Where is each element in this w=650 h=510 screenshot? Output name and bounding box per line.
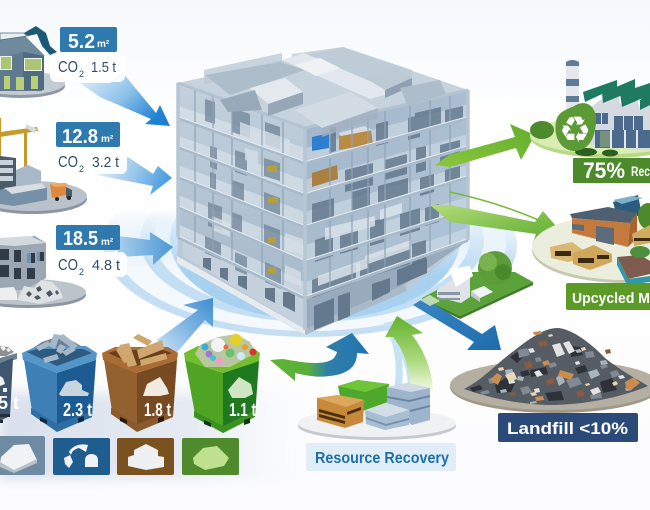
tile: concrete bbox=[0, 436, 45, 475]
tile: metal bbox=[53, 438, 110, 475]
interior equipment left face bbox=[205, 99, 281, 289]
badge: 12.8 m2 bbox=[56, 122, 120, 148]
tonnage label: 1.8 t bbox=[144, 400, 171, 420]
roof equipment bbox=[205, 62, 305, 95]
label: CO2 4.8 t bbox=[50, 252, 127, 277]
arrow: building to landfill bbox=[413, 298, 501, 350]
landfill disc bbox=[450, 361, 650, 413]
label: landfill bbox=[498, 413, 638, 442]
label: resource recovery: Resource Recovery bbox=[315, 450, 449, 467]
yellow equipment bbox=[267, 166, 278, 273]
tile: wood bbox=[117, 438, 174, 475]
panel: landfill bbox=[450, 328, 650, 413]
factory wall bbox=[590, 87, 650, 150]
icon: recycle: ♻ bbox=[559, 110, 591, 151]
brick block bbox=[572, 218, 630, 247]
swirl around the building bbox=[103, 153, 517, 337]
green bales bbox=[338, 380, 389, 412]
small white building bbox=[437, 266, 493, 303]
badge: 18.5 m2: m² bbox=[101, 237, 114, 248]
arrow: demolition to building bbox=[118, 232, 173, 265]
label: CO2 3.2 t bbox=[50, 148, 127, 174]
corner posts bbox=[178, 83, 468, 330]
green patch with small building and tree bbox=[422, 251, 533, 319]
icon: plastic bales bbox=[228, 377, 253, 398]
site disc bbox=[0, 282, 86, 308]
floor plates bbox=[178, 106, 305, 298]
badge: 5.2 m2 bbox=[60, 27, 117, 53]
tonnage label: 2.3 t bbox=[63, 400, 92, 420]
shrubs bbox=[530, 121, 554, 139]
label: CO2 3.2 t: 2 bbox=[79, 164, 84, 174]
truck bbox=[50, 183, 66, 198]
site disc bbox=[0, 184, 87, 214]
rubble bbox=[17, 280, 63, 304]
label: CO2 1.5 t bbox=[50, 55, 125, 82]
sawtooth roof bbox=[583, 79, 650, 110]
label: 75% recycled bbox=[573, 158, 650, 183]
building block bbox=[0, 156, 16, 190]
arrow: building to upcycled bbox=[430, 205, 562, 245]
badge: 12.8 m2: 12.8 bbox=[62, 126, 98, 148]
icon: stone bbox=[59, 380, 89, 396]
windows bbox=[595, 113, 650, 148]
arrow: building to recycled bbox=[435, 124, 535, 167]
label: CO2 3.2 t: CO bbox=[58, 154, 78, 171]
bin: concrete bbox=[0, 346, 19, 423]
floor slabs bbox=[178, 118, 468, 298]
label: 75% recycled: 75% bbox=[583, 158, 625, 183]
label: CO2 4.8 t: 2 bbox=[79, 267, 84, 277]
tree bbox=[478, 251, 512, 285]
grey metal stack back bbox=[387, 383, 430, 425]
building bbox=[177, 47, 468, 335]
disc bbox=[532, 217, 650, 283]
bin: metal bbox=[22, 334, 97, 432]
panel: recycled factory bbox=[530, 60, 650, 158]
label: resource recovery bbox=[306, 443, 456, 471]
demolished building bbox=[0, 236, 46, 290]
bales bbox=[617, 255, 650, 279]
floor band under bins bbox=[0, 393, 320, 480]
right glass face bbox=[305, 90, 468, 298]
tree bbox=[638, 203, 650, 229]
icon: stone lump bbox=[143, 377, 169, 396]
building plinth bbox=[177, 237, 468, 335]
ground storey bbox=[183, 240, 305, 329]
pallets bbox=[550, 242, 583, 262]
roof bbox=[178, 47, 468, 128]
crane bbox=[0, 118, 38, 168]
label: CO2 4.8 t: CO bbox=[58, 257, 78, 274]
wooden crate lower bbox=[312, 165, 338, 187]
interior equipment right face bbox=[312, 106, 463, 298]
recycle badge bbox=[555, 103, 596, 151]
blue box in building bbox=[312, 133, 329, 151]
chimney bbox=[566, 60, 579, 110]
label: CO2 1.5 t: 2 bbox=[79, 69, 84, 79]
grey metal stack front bbox=[365, 403, 409, 430]
badge: 18.5 m2 bbox=[56, 225, 120, 250]
arrow: recovered materials upward bbox=[384, 316, 433, 390]
blue crate bbox=[613, 195, 642, 220]
bin: mixed plastics bbox=[184, 334, 260, 433]
label: CO2 1.5 t: 1.5 t bbox=[91, 59, 117, 76]
bin: wood bbox=[102, 334, 178, 432]
tile: plastics bbox=[182, 438, 239, 475]
badge: 5.2 m2: m² bbox=[97, 39, 110, 50]
wooden pallet stack bbox=[317, 395, 364, 428]
label: CO2 4.8 t: 4.8 t bbox=[92, 257, 121, 274]
crane arm bbox=[24, 26, 57, 55]
mullions bbox=[195, 89, 450, 289]
label: CO2 3.2 t: 3.2 t bbox=[92, 154, 120, 171]
panel: resource recovery materials bbox=[298, 380, 456, 440]
label: landfill: Landfill <10% bbox=[507, 419, 628, 438]
arrow: recovery curved to building bbox=[270, 333, 369, 381]
factory disc bbox=[530, 116, 650, 158]
panel: upcycled materials bbox=[532, 195, 650, 285]
arrow: bins to building bbox=[157, 298, 213, 358]
panel: demolition site bbox=[0, 236, 86, 308]
tonnage label: 1.1 t bbox=[229, 400, 256, 420]
wooden crate upper bbox=[339, 130, 373, 150]
arrow: house to building bbox=[80, 72, 170, 126]
house bbox=[0, 37, 44, 91]
site disc bbox=[0, 74, 65, 98]
left glass face bbox=[178, 83, 305, 298]
disc bbox=[298, 412, 456, 440]
badge: 12.8 m2: m² bbox=[101, 134, 114, 145]
badge: 18.5 m2: 18.5 bbox=[63, 228, 98, 250]
badge: 5.2 m2: 5.2 bbox=[68, 31, 95, 53]
panel: mid-rise construction site bbox=[0, 118, 87, 214]
label: CO2 1.5 t: CO bbox=[58, 59, 78, 76]
roof parapet glass bbox=[204, 47, 412, 92]
panel: house site bbox=[0, 26, 65, 98]
label: upcycled materials bbox=[566, 283, 650, 310]
rubble pile bbox=[464, 328, 648, 405]
arrow: mid-rise to building bbox=[97, 157, 172, 195]
